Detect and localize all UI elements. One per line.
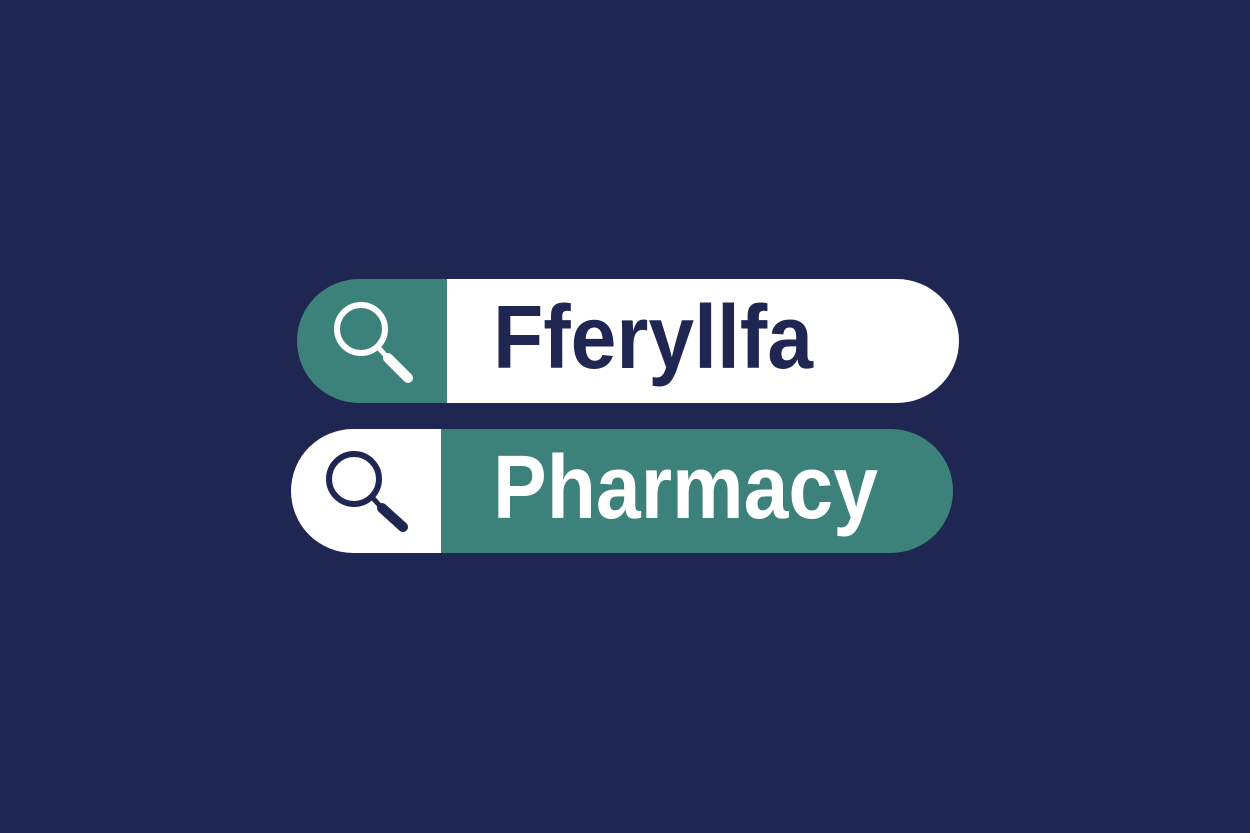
text: Pharmacy: Pharmacy [493,438,878,538]
text: Fferyllfa: Fferyllfa [493,288,814,388]
search bar: Pharmacy [291,429,953,553]
search bar: Fferyllfa [297,279,959,403]
icon: magnifier navy [329,454,403,527]
icon: magnifier white [337,305,408,378]
